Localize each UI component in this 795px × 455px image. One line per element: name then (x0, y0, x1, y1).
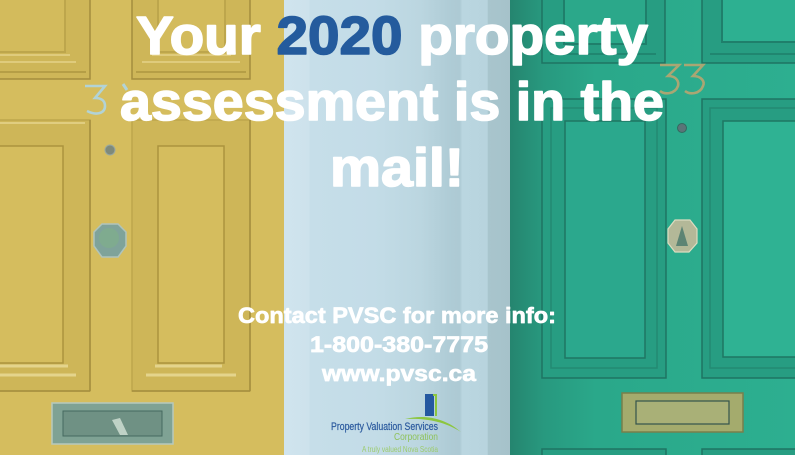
panel: yellow top right (132, 0, 250, 79)
logo: Property Valuation Services Corporation (331, 394, 461, 454)
background: green door (510, 0, 795, 455)
panel: green top right (702, 0, 795, 63)
panel: green bottom panels (542, 449, 795, 455)
panel: yellow lower right (132, 120, 250, 391)
panel: green lower left (542, 99, 666, 378)
icon: green door spy hole (678, 124, 686, 132)
icon: yellow door number 3 (85, 84, 127, 113)
icon: green door number 33 (660, 65, 704, 93)
icon: yellow door spy hole (105, 145, 115, 155)
panel: green top left (542, 0, 665, 63)
logo tagline: A truly valued Nova Scotia (362, 445, 438, 454)
panel: green lower right (702, 99, 795, 378)
contact details (238, 303, 556, 386)
background: pale blue door column (284, 0, 511, 455)
panel: yellow lower left (0, 120, 90, 391)
icon: logo door (425, 394, 437, 416)
logo corporation: Corporation (394, 432, 438, 443)
contact details: www.pvsc.ca (321, 361, 477, 386)
title (120, 6, 664, 198)
background: yellow door (0, 0, 285, 455)
icon: yellow door knob (94, 224, 126, 257)
panel: yellow top left (0, 0, 90, 79)
icon: logo swoosh (405, 417, 461, 432)
title: Your 2020 property (136, 6, 648, 66)
logo name: Property Valuation Services (331, 421, 438, 433)
contact details: 1-800-380-7775 (310, 332, 488, 357)
icon: green door letter slot (622, 393, 743, 432)
title: mail! (330, 138, 464, 198)
contact details: Contact PVSC for more info: (238, 303, 556, 328)
title: assessment is in the (120, 72, 664, 132)
icon: green door knob (668, 220, 697, 252)
icon: yellow door letter slot (52, 403, 173, 444)
